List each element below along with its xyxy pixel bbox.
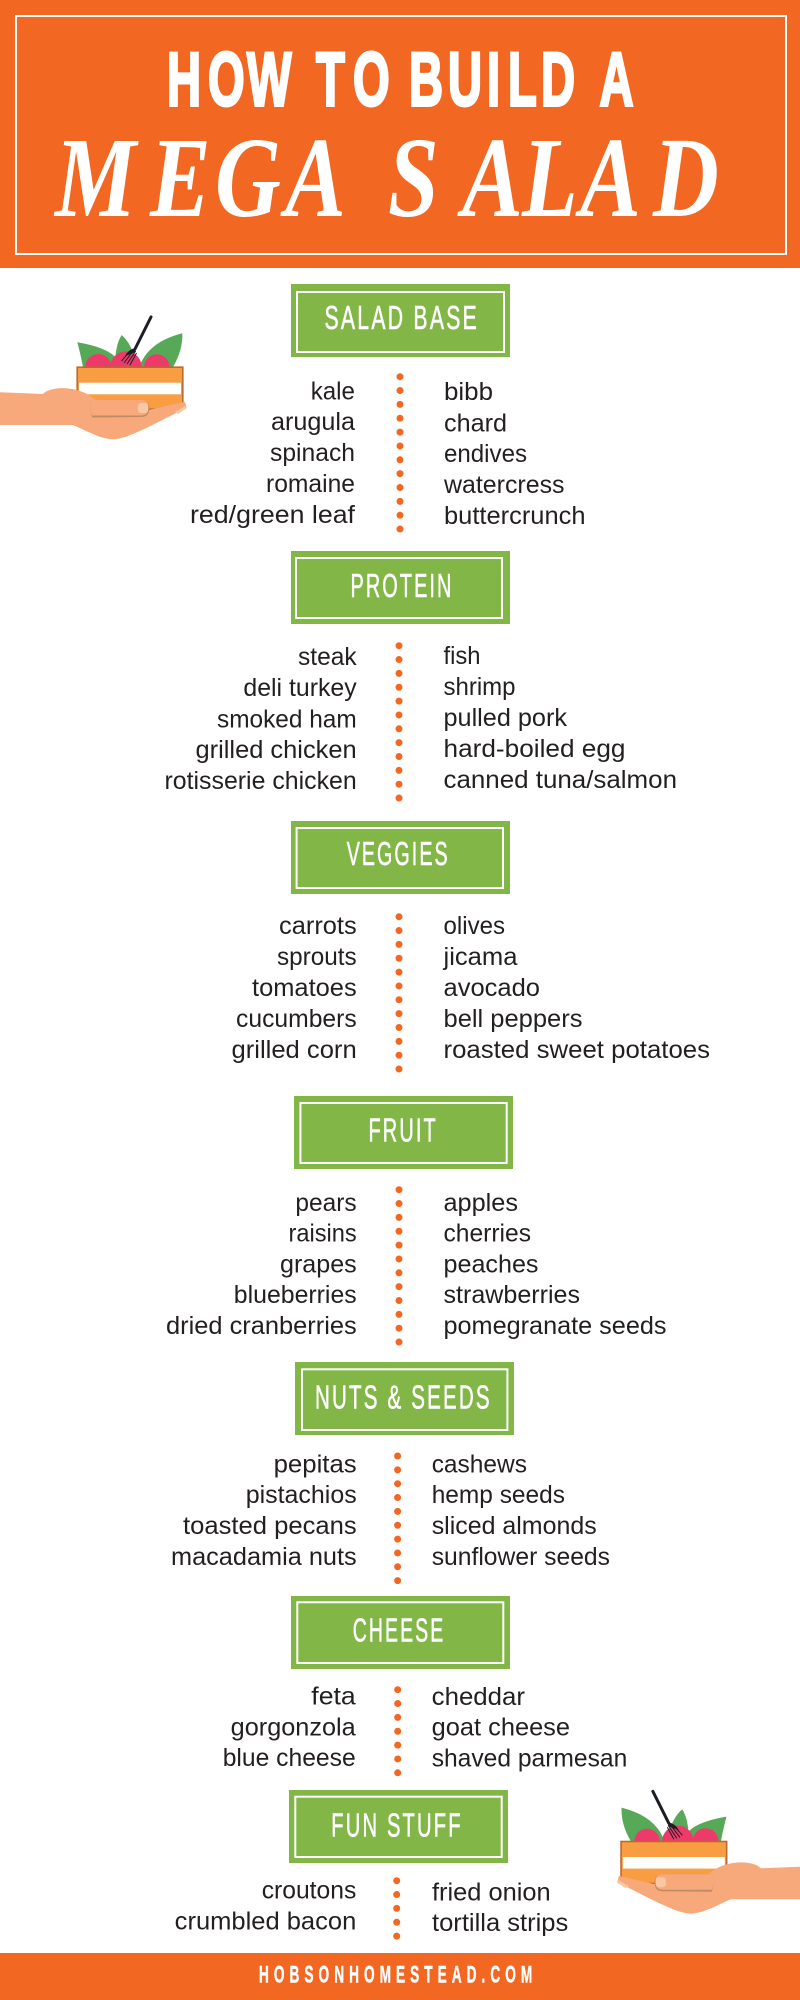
list: veggies left xyxy=(232,912,357,1064)
list: salad base right: chard xyxy=(444,410,507,438)
list: fruit right: strawberries xyxy=(444,1281,580,1309)
list: protein right xyxy=(444,642,677,794)
list: fruit right: peaches xyxy=(444,1251,538,1279)
list: salad base left: romaine xyxy=(266,470,355,498)
icon: hand holding salad bowl, right xyxy=(617,1791,800,1914)
list: fruit right xyxy=(444,1189,666,1340)
list: salad base left: arugula xyxy=(271,408,355,436)
list: veggies left: tomatoes xyxy=(252,974,357,1002)
list: salad base right xyxy=(443,378,586,530)
list: fruit left: grapes xyxy=(280,1251,357,1279)
list: cheese left: blue cheese xyxy=(223,1744,356,1772)
heading badge: fun stuff: FUN STUFF xyxy=(331,1806,463,1843)
list: veggies right: jicama xyxy=(442,943,518,971)
list: salad base right: watercress xyxy=(443,471,564,499)
dotted divider: fun stuff xyxy=(393,1881,400,1939)
list: cheese right: goat cheese xyxy=(432,1714,570,1742)
heading badge: cheese xyxy=(291,1596,510,1669)
heading badge: veggies: VEGGIES xyxy=(347,835,450,872)
list: protein left: grilled chicken xyxy=(196,736,357,764)
list: fun stuff left: crumbled bacon xyxy=(175,1907,356,1935)
list: fruit right: cherries xyxy=(444,1220,531,1248)
list: protein left: rotisserie chicken xyxy=(164,767,357,795)
list: fruit left: pears xyxy=(295,1189,357,1217)
list: salad base right: buttercrunch xyxy=(444,502,586,530)
heading badge: fun stuff xyxy=(289,1790,508,1863)
list: veggies left: cucumbers xyxy=(236,1005,357,1033)
list: salad base left: spinach xyxy=(270,439,355,467)
list: nuts and seeds right: cashews xyxy=(432,1451,527,1479)
heading badge: nuts and seeds xyxy=(295,1362,514,1435)
list: salad base left: red/green leaf xyxy=(190,501,355,529)
panel: veggies xyxy=(232,821,710,1072)
list: cheese left: gorgonzola xyxy=(231,1713,356,1741)
list: salad base right: bibb xyxy=(444,378,493,406)
dotted divider: nuts and seeds xyxy=(394,1456,401,1584)
list: fun stuff right xyxy=(432,1878,568,1937)
list: cheese right: shaved parmesan xyxy=(432,1745,627,1773)
footer website text: HOBSONHOMESTEAD.COM xyxy=(259,1962,537,1989)
title: mega salad: MEGA SALAD xyxy=(53,116,719,241)
list: nuts and seeds left: pepitas xyxy=(274,1451,357,1479)
list: fruit left: dried cranberries xyxy=(166,1312,357,1340)
heading badge: cheese: CHEESE xyxy=(353,1611,445,1648)
list: veggies right xyxy=(442,912,710,1064)
list: nuts and seeds right: hemp seeds xyxy=(432,1481,565,1509)
list: fruit right: apples xyxy=(444,1189,518,1217)
list: nuts and seeds left: toasted pecans xyxy=(183,1512,357,1540)
list: fruit left xyxy=(166,1189,357,1340)
heading badge: nuts and seeds: NUTS & SEEDS xyxy=(315,1378,492,1415)
list: fun stuff left: croutons xyxy=(262,1877,356,1905)
list: fun stuff right: fried onion xyxy=(432,1878,551,1906)
list: veggies right: olives xyxy=(444,912,505,940)
list: protein left: deli turkey xyxy=(243,674,357,702)
list: cheese left: feta xyxy=(311,1682,356,1710)
dotted divider: protein xyxy=(396,646,402,801)
icon: hand holding salad bowl, left xyxy=(0,317,187,439)
heading badge: salad base: SALAD BASE xyxy=(324,299,479,336)
list: nuts and seeds right xyxy=(432,1451,610,1571)
panel: fun stuff xyxy=(175,1790,568,1939)
list: veggies right: bell peppers xyxy=(444,1005,582,1033)
heading badge: veggies xyxy=(291,821,510,894)
list: cheese left xyxy=(223,1682,356,1772)
list: fruit left: raisins xyxy=(288,1220,357,1248)
list: cheese right: cheddar xyxy=(432,1683,525,1711)
list: cheese right xyxy=(432,1683,627,1773)
panel: cheese xyxy=(223,1596,627,1776)
panel: nuts and seeds xyxy=(171,1362,610,1584)
list: fruit right: pomegranate seeds xyxy=(444,1312,666,1340)
list: nuts and seeds right: sliced almonds xyxy=(432,1512,597,1540)
list: fun stuff left xyxy=(175,1877,356,1935)
list: protein right: fish xyxy=(444,642,480,670)
list: veggies right: avocado xyxy=(444,974,540,1002)
list: fruit left: blueberries xyxy=(234,1281,357,1309)
heading badge: fruit xyxy=(294,1096,513,1169)
list: veggies left: grilled corn xyxy=(232,1036,357,1064)
panel: protein xyxy=(164,551,677,801)
list: veggies right: roasted sweet potatoes xyxy=(444,1036,710,1064)
dotted divider: salad base xyxy=(396,377,404,532)
heading badge: protein: PROTEIN xyxy=(350,567,454,604)
list: protein left: smoked ham xyxy=(217,706,357,734)
list: protein left: steak xyxy=(298,643,357,671)
dotted divider: cheese xyxy=(394,1690,401,1776)
list: salad base right: endives xyxy=(444,440,527,468)
dotted divider: fruit xyxy=(396,1190,402,1345)
heading badge: salad base xyxy=(291,284,510,357)
list: nuts and seeds left xyxy=(171,1451,357,1571)
heading badge: fruit: FRUIT xyxy=(368,1112,438,1149)
list: salad base left: kale xyxy=(311,377,355,405)
list: nuts and seeds right: sunflower seeds xyxy=(432,1543,610,1571)
list: veggies left: carrots xyxy=(279,912,357,940)
footer band xyxy=(0,1953,800,2000)
panel: fruit xyxy=(166,1096,666,1345)
list: fun stuff right: tortilla strips xyxy=(432,1909,568,1937)
panel: salad base xyxy=(190,284,586,532)
list: nuts and seeds left: macadamia nuts xyxy=(171,1543,357,1571)
list: protein right: hard-boiled egg xyxy=(444,735,626,763)
heading badge: protein xyxy=(291,551,510,624)
list: protein left xyxy=(164,643,357,795)
list: veggies left: sprouts xyxy=(277,943,357,971)
list: nuts and seeds left: pistachios xyxy=(246,1481,357,1509)
title: how to build a: HOW TO BUILD A xyxy=(167,38,634,122)
list: protein right: canned tuna/salmon xyxy=(444,766,677,794)
list: salad base left xyxy=(190,377,355,529)
panel: header banner xyxy=(0,0,800,268)
dotted divider: veggies xyxy=(396,917,402,1072)
list: protein right: shrimp xyxy=(444,673,516,701)
list: protein right: pulled pork xyxy=(444,704,567,732)
